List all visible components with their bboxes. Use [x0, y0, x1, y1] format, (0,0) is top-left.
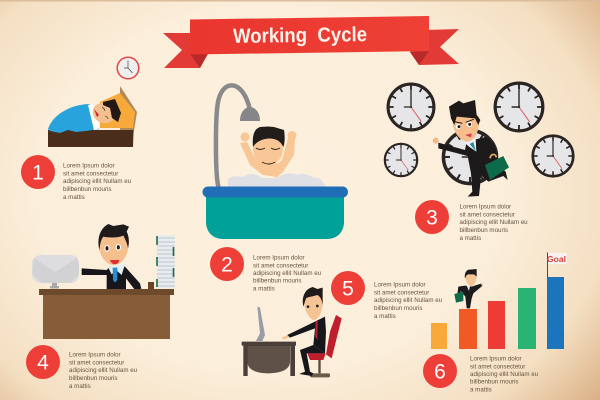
bed pillow	[100, 93, 135, 128]
text block 1: Lorem Ipsum dolor	[63, 162, 115, 170]
text block 3: Lorem Ipsum dolor	[460, 204, 511, 210]
scene 3: man running among clocks	[384, 83, 574, 197]
pillow sheet	[88, 104, 100, 130]
marker 3	[415, 200, 449, 234]
face	[90, 99, 121, 126]
text block 4: a mattis	[69, 383, 91, 390]
text block 4: adipiscing ellit Nullam eu	[69, 367, 138, 374]
computer desk	[242, 342, 296, 376]
desk body	[43, 295, 170, 339]
text block 2: Lorem Ipsum dolor	[253, 254, 305, 262]
clock behind man	[443, 130, 497, 184]
clock top left	[388, 84, 434, 130]
text block 6: billbenbun mouris	[470, 378, 518, 386]
scene 5: man seated at computer	[242, 287, 342, 377]
ribbon band	[190, 16, 429, 54]
text block 5	[374, 282, 443, 320]
shower pipe	[216, 85, 250, 187]
scene 6: bar chart with goal flag	[431, 252, 567, 349]
marker 5	[331, 271, 365, 305]
clock right	[532, 135, 574, 177]
scene 4: man working at office desk	[32, 224, 175, 339]
text block 4	[69, 352, 138, 390]
marker 2: 2	[221, 254, 233, 276]
tub rim	[202, 186, 348, 198]
marker 4	[26, 345, 60, 379]
office chair	[307, 315, 342, 377]
text block 1: a mattis	[63, 194, 85, 201]
bar 1	[431, 323, 447, 349]
text block 3: adipiscing ellit Nullam eu	[460, 219, 528, 226]
text block 4: billbenbun mouris	[69, 375, 118, 382]
text block 2: a mattis	[253, 286, 275, 292]
text block 5: a mattis	[374, 313, 396, 320]
marker 6	[423, 354, 457, 388]
text block 1: adipiscing ellit Nullam eu	[63, 178, 132, 185]
headboard	[120, 86, 137, 137]
title: Working Cycle	[233, 23, 367, 48]
monitor back	[32, 255, 79, 288]
tub body	[206, 196, 344, 239]
bar 5	[547, 277, 564, 349]
text block 5: billbenbun mouris	[374, 305, 422, 312]
pen cup	[148, 282, 154, 289]
marker 1: 1	[32, 162, 44, 184]
marker 5: 5	[342, 278, 354, 300]
text block 5: Lorem Ipsum dolor	[374, 282, 426, 288]
monitor side	[256, 307, 266, 341]
goal flag: Goal	[547, 254, 566, 264]
marker 6: 6	[434, 360, 446, 384]
text block 6	[470, 356, 539, 394]
text block 4: Lorem Ipsum dolor	[69, 352, 121, 358]
text block 6: a mattis	[470, 386, 492, 394]
seated man	[282, 287, 326, 376]
text block 1	[63, 162, 132, 201]
desk top	[39, 289, 174, 295]
blanket	[48, 104, 99, 133]
ribbon left tail	[163, 33, 208, 68]
text block 2	[253, 254, 322, 292]
text block 2: sit amet consectetur	[253, 262, 308, 270]
text block 1: billbenbun mouris	[63, 186, 112, 193]
text block 4: sit amet consectetur	[69, 360, 124, 366]
bar 4	[518, 288, 536, 349]
paper stack	[157, 235, 175, 288]
scene 1: sleeping man in bed with clock	[48, 57, 139, 147]
bar 2	[459, 309, 477, 349]
text block 2: adipiscing ellit Nullam eu	[253, 270, 322, 277]
clock small left	[384, 143, 418, 177]
text block 5: adipiscing ellit Nullam eu	[374, 297, 443, 304]
text block 3: billbenbun mouris	[460, 227, 508, 234]
marker 3: 3	[426, 206, 438, 230]
shower head	[240, 107, 260, 121]
man bathing	[240, 126, 296, 178]
marker 2	[210, 247, 244, 281]
text block 1: sit amet consectetur	[63, 170, 118, 178]
text block 3	[460, 204, 528, 242]
text block 6: sit amet consectetur	[470, 364, 525, 370]
text block 6: adipiscing ellit Nullam eu	[470, 371, 539, 378]
icon: alarm clock	[117, 57, 139, 79]
running man	[433, 100, 509, 197]
marker 1	[21, 155, 55, 189]
foam	[228, 173, 326, 187]
climbing man	[454, 269, 483, 308]
text block 6: Lorem Ipsum dolor	[470, 356, 522, 362]
man at desk	[82, 224, 143, 296]
text block 2: billbenbun mouris	[253, 278, 302, 284]
ribbon right tail	[410, 29, 459, 65]
bed base	[48, 130, 134, 147]
text block 3: a mattis	[460, 235, 481, 242]
bar 3	[488, 301, 505, 349]
title ribbon	[163, 16, 459, 68]
ribbon folds	[190, 51, 429, 68]
clock top right	[495, 83, 543, 131]
top edge strip	[0, 0, 600, 2]
scene 2: man in bathtub under shower	[202, 85, 348, 239]
text block 5: sit amet consectetur	[374, 290, 429, 296]
marker 4: 4	[37, 352, 49, 374]
text block 3: sit amet consectetur	[460, 212, 515, 218]
